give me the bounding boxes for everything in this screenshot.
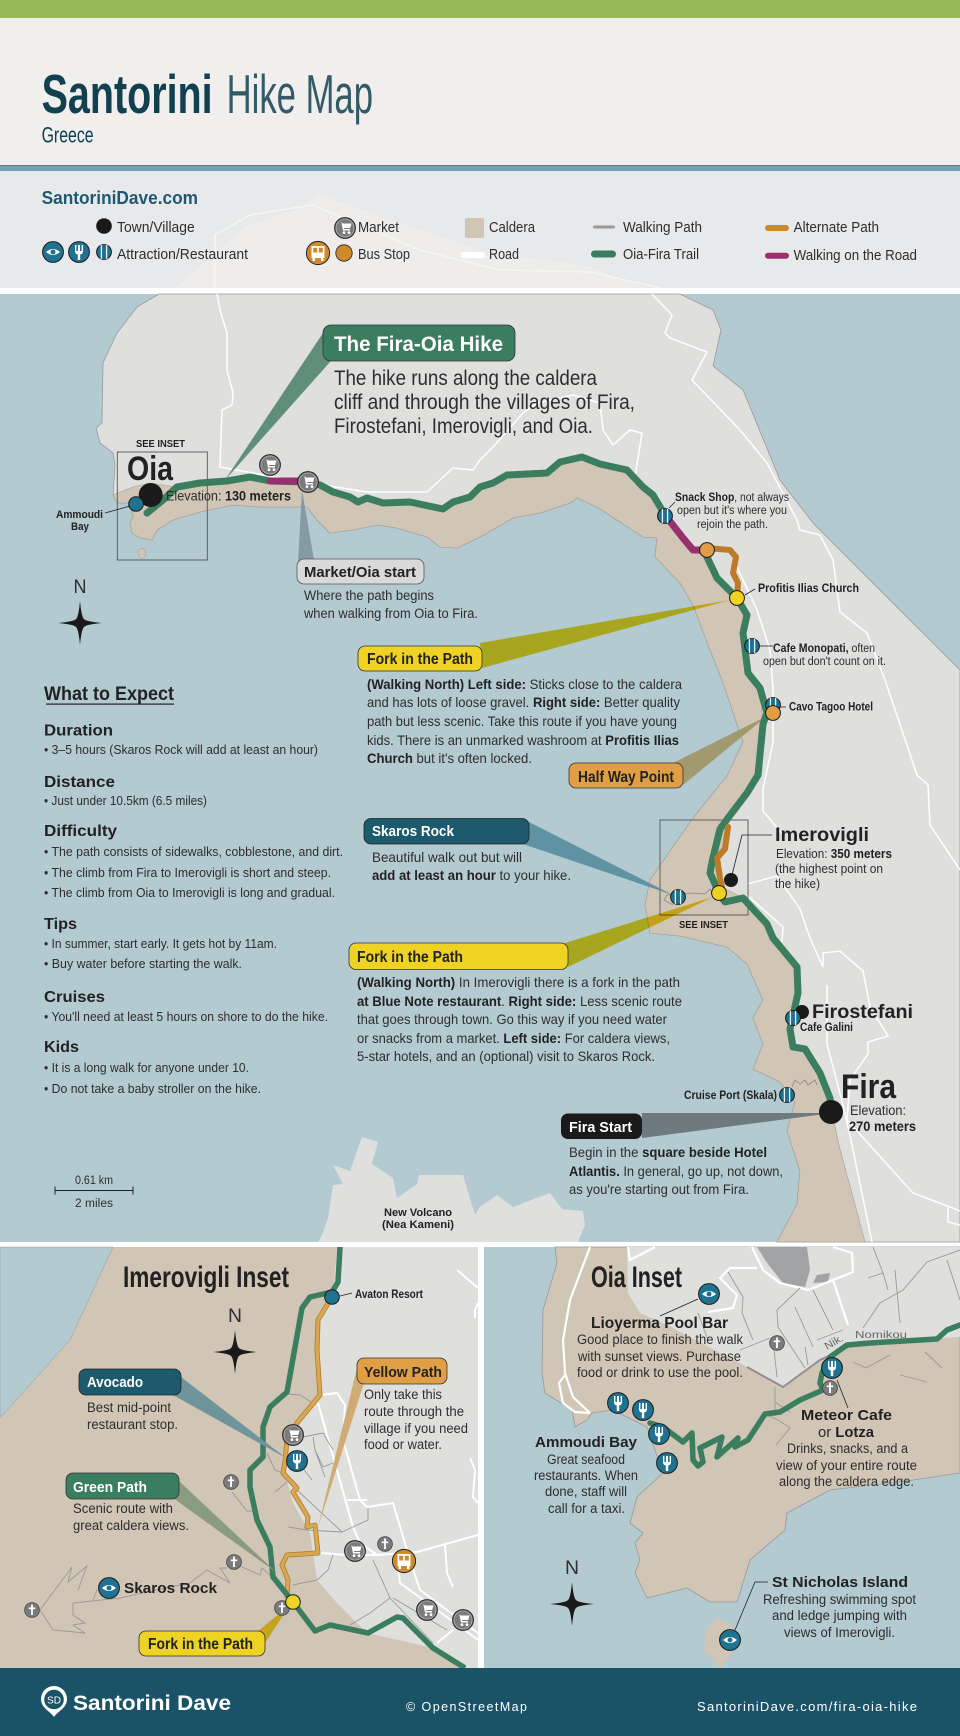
callout: Fork in the Path Imerovigli	[349, 943, 682, 1064]
town: Fira	[819, 1068, 916, 1134]
caldera band	[113, 457, 865, 1242]
cruises: Cruises	[44, 989, 105, 1006]
label: Meteor Cafe or Lotza	[776, 1358, 917, 1489]
callout: Skaros Rock: add at least an hour to your hike.	[372, 867, 571, 883]
green trail	[250, 1247, 465, 1668]
logo: SD	[47, 1694, 61, 1706]
label: Meteor Cafe or Lotza: Drinks, snacks, and a	[787, 1441, 908, 1456]
label: Snack Shop: open but it's where you	[677, 505, 787, 517]
kids: • Do not take a baby stroller on the hike.	[44, 1081, 261, 1096]
callout: Fork in the Path north: kids. There is an unmarked washroom at Profitis Ilias	[367, 732, 679, 748]
label: Cavo Tagoo Hotel	[766, 698, 873, 720]
callout: Fira Start	[561, 1114, 783, 1197]
town: Imerovigli: Elevation: 350 meters	[776, 847, 892, 861]
callout: Yellow Path	[357, 1358, 468, 1452]
label: Snack Shop: Snack Shop, not always	[675, 492, 789, 504]
white roads	[559, 1247, 853, 1413]
legend attraction	[43, 242, 249, 263]
panel: Oia inset	[484, 1247, 960, 1668]
callout: Fork in the Path Imerovigli: that goes through town. Go this way if you need water	[357, 1011, 667, 1027]
difficulty	[44, 823, 343, 900]
town: Imerovigli: (the highest point on	[775, 862, 883, 876]
callout: Avocado: Avocado	[87, 1374, 143, 1391]
legend trail: Oia-Fira Trail	[623, 246, 699, 263]
legend road: Road	[489, 246, 519, 263]
callout: Fork in the Path north: (Walking North) Left side: Sticks close to the caldera	[367, 676, 682, 692]
label: Meteor Cafe or Lotza: Meteor Cafe	[801, 1407, 892, 1424]
callout: Yellow Path: food or water.	[364, 1437, 442, 1452]
callout: Fira-Oia Hike: cliff and through the villages of Fira,	[334, 391, 635, 414]
legend bus stop: Bus Stop	[358, 246, 410, 263]
callout: Skaros Rock	[364, 818, 571, 883]
label: Cafe Monopati: open but don't count on it.	[763, 656, 886, 668]
logo: Santorini Dave	[73, 1692, 231, 1715]
duration: • 3–5 hours (Skaros Rock will add at least an hour)	[44, 742, 318, 757]
label: St Nicholas Island: Refreshing swimming spot	[763, 1592, 916, 1607]
callout: Fork in the Path Imerovigli: 5-star hotels, and an (optional) visit to Skaros Rock.	[357, 1048, 655, 1064]
kids	[44, 1039, 261, 1096]
legend walking path	[593, 219, 702, 236]
header band	[0, 0, 960, 171]
label: St Nicholas Island: St Nicholas Island	[772, 1574, 908, 1591]
callout: Fork in the Path	[139, 1631, 265, 1656]
scale bar: 2 miles	[75, 1198, 113, 1210]
legend site name: SantoriniDave.com	[42, 187, 198, 208]
label: Cavo Tagoo Hotel: Cavo Tagoo Hotel	[789, 702, 873, 714]
label: St Nicholas Island: views of Imerovigli.	[784, 1625, 895, 1640]
callout: Half Way Point: Half Way Point	[578, 769, 674, 786]
callout: Avocado	[79, 1369, 181, 1432]
icon: church	[770, 1336, 784, 1350]
volcano island	[318, 1137, 585, 1242]
yellow path	[282, 1297, 332, 1598]
credit: © OpenStreetMap	[406, 1700, 527, 1714]
compass: N	[74, 577, 86, 598]
subtitle: Greece	[42, 123, 94, 148]
legend trail	[591, 246, 699, 263]
tips: • Buy water before starting the walk.	[44, 956, 242, 971]
label: Ammoudi Bay	[534, 1393, 677, 1516]
label: Cafe Monopati: Cafe Monopati, often	[773, 643, 875, 655]
callout: Skaros Rock: Beautiful walk out but will	[372, 849, 522, 865]
cruises	[44, 989, 328, 1024]
legend panel	[0, 171, 960, 288]
callout: Fork in the Path north: Church but it's often locked.	[367, 750, 532, 766]
callout: Fork in the Path: Fork in the Path	[148, 1636, 253, 1653]
pointer wedges	[225, 333, 832, 1138]
tips: Tips	[44, 916, 77, 933]
compass	[550, 1558, 594, 1626]
St Nicholas island shape	[704, 1618, 738, 1668]
tips	[44, 916, 277, 971]
distance: • Just under 10.5km (6.5 miles)	[44, 793, 207, 808]
callout: Skaros Rock: Skaros Rock	[372, 823, 455, 840]
label: Meteor Cafe or Lotza: along the caldera edge.	[779, 1474, 914, 1489]
inset frame: Imerovigli: SEE INSET	[679, 920, 728, 931]
island land	[96, 294, 960, 1242]
Avaton Resort: Avaton Resort	[355, 1289, 423, 1301]
street label: Nomikou	[855, 1329, 907, 1341]
gravel side paths	[664, 889, 817, 1087]
label: Lioyerma Pool Bar: with sunset views. Purchase	[577, 1349, 741, 1364]
distance: Distance	[44, 774, 115, 791]
label: St Nicholas Island: and ledge jumping with	[772, 1608, 907, 1623]
duration: Duration	[44, 723, 113, 740]
heading: What to Expect	[44, 684, 175, 705]
label: Lioyerma Pool Bar: Good place to finish the walk	[577, 1332, 743, 1347]
callout: Fork in the Path north: and has lots of loose gravel. Right side: Better quality	[367, 694, 680, 710]
callout: Market/Oia start: Where the path begins	[304, 588, 434, 603]
difficulty: • The climb from Fira to Imerovigli is short and steep.	[44, 865, 331, 880]
town: Imerovigli: Imerovigli	[775, 825, 869, 846]
callout: Avocado: Best mid-point	[87, 1400, 171, 1415]
callout: Fork in the Path Imerovigli: at Blue Note restaurant. Right side: Less scenic route	[357, 993, 682, 1009]
scale bar	[55, 1175, 133, 1210]
map icons	[25, 1425, 473, 1630]
town: Oia: Elevation: 130 meters	[166, 488, 291, 504]
inset frame: Oia	[117, 439, 207, 560]
distance	[44, 774, 207, 808]
callout: Fira-Oia Hike: Firostefani, Imerovigli, and Oia.	[334, 415, 593, 438]
thin roads	[698, 1247, 960, 1445]
label: Cafe Monopati	[745, 639, 886, 668]
label: Lioyerma Pool Bar: food or drink to use the pool.	[577, 1365, 743, 1380]
pointer wedges	[173, 1368, 364, 1643]
legend market	[335, 218, 400, 238]
legend walking path: Walking Path	[623, 219, 702, 236]
footer	[0, 1668, 960, 1736]
title: Santorini	[42, 63, 213, 125]
legend caldera	[465, 218, 536, 238]
town: Firostefani: Cafe Galini	[800, 1022, 853, 1034]
callout: Market/Oia start: Market/Oia start	[304, 564, 416, 581]
town: Fira: Fira	[841, 1068, 897, 1106]
callout: Fork in the Path north: path but less scenic. Take this route if you have young	[367, 713, 677, 729]
legend attraction: Attraction/Restaurant	[117, 246, 249, 263]
url: SantoriniDave.com/fira-oia-hike	[697, 1699, 917, 1714]
inset title: Imerovigli Inset	[123, 1261, 289, 1294]
compass: N	[565, 1558, 579, 1579]
label: St Nicholas Island	[720, 1574, 916, 1650]
callout: Yellow Path: Yellow Path	[364, 1364, 442, 1381]
callout: Yellow Path: Only take this	[364, 1387, 442, 1402]
duration	[44, 723, 318, 757]
Oia-Fira trail	[147, 457, 831, 1112]
town land	[627, 1247, 960, 1387]
label: Cruise Port: Cruise Port (Skala)	[684, 1090, 777, 1102]
inset frame: Imerovigli	[660, 820, 748, 931]
callout: Avocado: restaurant stop.	[87, 1417, 178, 1432]
callout: Fork in the Path north: Fork in the Path	[367, 651, 473, 668]
callout: Yellow Path: village if you need	[364, 1421, 468, 1436]
volcano island: New Volcano	[384, 1207, 452, 1219]
label: Meteor Cafe or Lotza: view of your entire route	[776, 1458, 917, 1473]
volcano island: (Nea Kameni)	[382, 1219, 454, 1231]
street label: Nik.	[822, 1332, 846, 1353]
green trail	[650, 1325, 960, 1466]
town: Oia	[127, 450, 291, 511]
label: Lioyerma Pool Bar	[577, 1284, 743, 1380]
callout: Fira Start: Begin in the square beside Hotel	[569, 1144, 767, 1160]
callout: Green Path: Scenic route with	[73, 1501, 173, 1516]
callout: Fira Start: as you're starting out from Fira.	[569, 1181, 749, 1197]
callout: Green Path	[66, 1473, 189, 1533]
legend alternate path: Alternate Path	[794, 219, 879, 236]
callout: Green Path: great caldera views.	[73, 1518, 189, 1533]
town block	[757, 1247, 830, 1287]
callout: Fork in the Path north	[358, 646, 682, 766]
village land	[283, 1247, 478, 1668]
legend town: Town/Village	[117, 219, 195, 236]
compass	[213, 1306, 257, 1374]
legend walking on road: Walking on the Road	[794, 247, 917, 264]
label: Skaros Rock	[99, 1578, 218, 1598]
callout: Fork in the Path Imerovigli: or snacks from a market. Left side: For caldera views,	[357, 1030, 670, 1046]
inset frame: Oia: SEE INSET	[136, 439, 185, 450]
label: Ammoudi Bay: done, staff will	[545, 1484, 627, 1499]
street label	[822, 1329, 907, 1353]
callout: Market/Oia start	[297, 559, 478, 621]
legend market: Market	[358, 219, 400, 236]
panel: Imerovigli inset	[0, 1247, 478, 1668]
kids: • It is a long walk for anyone under 10.	[44, 1060, 249, 1075]
legend alternate path	[765, 219, 879, 236]
callout: Fira-Oia Hike: The Fira-Oia Hike	[334, 333, 503, 356]
sea	[0, 1247, 113, 1418]
town: Imerovigli	[671, 825, 892, 904]
label: Ammoudi Bay	[56, 506, 130, 533]
legend caldera: Caldera	[489, 219, 536, 236]
label: Lioyerma Pool Bar: Lioyerma Pool Bar	[591, 1315, 728, 1332]
label: Skaros Rock: Skaros Rock	[124, 1580, 218, 1597]
what to expect panel	[44, 684, 343, 1096]
label: Ammoudi Bay: Great seafood	[547, 1452, 625, 1467]
legend road	[460, 246, 519, 263]
cruises: • You'll need at least 5 hours on shore to do the hike.	[44, 1009, 328, 1024]
title: Hike Map	[227, 63, 373, 125]
town: Fira: Elevation:	[850, 1102, 906, 1118]
town: Firostefani: Firostefani	[812, 1002, 913, 1023]
label: Ammoudi Bay: Ammoudi Bay	[535, 1434, 638, 1451]
difficulty: Difficulty	[44, 823, 117, 840]
callout: Fira-Oia Hike	[323, 325, 635, 438]
road network	[217, 294, 960, 1242]
label: Ammoudi Bay: call for a taxi.	[548, 1501, 625, 1516]
market icons	[260, 455, 318, 492]
compass: N	[228, 1306, 242, 1327]
callout: Fork in the Path Imerovigli: Fork in the Path	[357, 949, 463, 966]
inset title: Oia Inset	[591, 1261, 682, 1294]
label: Meteor Cafe or Lotza: or Lotza	[818, 1425, 875, 1441]
town: Oia: Oia	[127, 450, 174, 488]
kids: Kids	[44, 1039, 79, 1056]
callout: Yellow Path: route through the	[364, 1404, 464, 1419]
Avaton Resort	[325, 1289, 423, 1304]
legend bus stop	[306, 241, 410, 265]
label: Profitis Ilias Church: Profitis Ilias Church	[758, 583, 859, 595]
label: Ammoudi Bay: Ammoudi	[56, 509, 103, 521]
label: Ammoudi Bay: Bay	[71, 521, 90, 533]
difficulty: • The path consists of sidewalks, cobblestone, and dirt.	[44, 844, 343, 859]
callout: Market/Oia start: when walking from Oia to Fira.	[303, 606, 478, 621]
difficulty: • The climb from Oia to Imerovigli is long and gradual.	[44, 885, 335, 900]
callout: Fira Start: Atlantis. In general, go up, not down,	[569, 1163, 783, 1179]
label: Profitis Ilias Church	[700, 543, 859, 605]
callout: Fira Start: Fira Start	[569, 1119, 632, 1136]
town: Fira: 270 meters	[849, 1118, 916, 1134]
roads	[318, 1270, 478, 1643]
label: Ammoudi Bay: restaurants. When	[534, 1468, 638, 1483]
label: Snack Shop: rejoin the path.	[697, 519, 768, 531]
scale bar: 0.61 km	[75, 1175, 113, 1187]
town: Imerovigli: the hike)	[775, 877, 820, 891]
callout: Green Path: Green Path	[73, 1479, 147, 1496]
walking paths	[40, 1394, 447, 1643]
logo	[41, 1686, 231, 1717]
compass	[58, 577, 102, 645]
callout: Fork in the Path Imerovigli: (Walking North) In Imerovigli there is a fork in the path	[357, 974, 680, 990]
headland	[542, 1247, 960, 1602]
panel: main map	[0, 294, 960, 1242]
town: Firostefani	[786, 1002, 913, 1034]
callout: Fira-Oia Hike: The hike runs along the caldera	[334, 367, 597, 390]
label: Snack Shop	[658, 492, 789, 531]
tips: • In summer, start early. It gets hot by 11am.	[44, 936, 277, 951]
callout: Half Way Point	[569, 763, 683, 788]
